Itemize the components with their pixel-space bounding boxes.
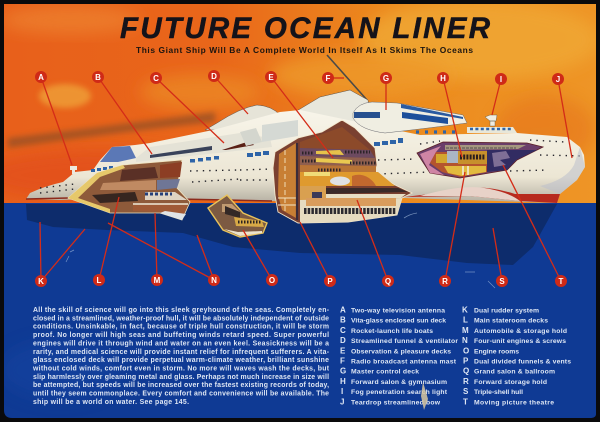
legend A to J: Radio broadcast antenna mast [351, 358, 457, 366]
callout markers: J [556, 75, 560, 84]
legend A to J: B [340, 316, 346, 325]
description text block: All the skill of science will go into this sleek greyhound of the seas. Completely en- [33, 307, 330, 314]
callout markers: E [268, 73, 274, 82]
callout markers: T [559, 277, 564, 286]
legend A to J: Observation & pleasure decks [351, 348, 451, 355]
legend K to T: L [463, 316, 468, 325]
legend A to J: Streamlined funnel & ventilator [351, 338, 458, 345]
hull waterline stripe [26, 198, 272, 201]
legend K to T: Moving picture theatre [474, 399, 554, 406]
description text block: engines will drive it through wind and water on an even keel. Seasickness will be a [33, 340, 329, 347]
callout markers: I [500, 75, 502, 84]
callout markers: F [326, 74, 331, 83]
stern deck funnel and sun deck detail [100, 120, 298, 162]
description text block: slip harmlessly over gleaming metal and glass. Perhaps not much increase in size will [33, 374, 329, 381]
underwater highlights [66, 213, 495, 288]
legend K to T: N [462, 336, 468, 345]
callout markers [35, 70, 567, 287]
legend A to J: I [341, 387, 343, 396]
legend A to J: G [340, 367, 346, 376]
description text block: without cold winds, comfort even in storm. No more will waves wash the decks, but [32, 366, 330, 372]
legend A to J: J [340, 397, 344, 406]
legend A to J: Vita-glass enclosed sun deck [351, 318, 446, 325]
callout markers: M [154, 276, 161, 285]
ocean liner illustration [26, 55, 585, 288]
description text block: ship will be a world on water. See page 145. [33, 399, 189, 406]
legend K to T: Dual divided funnels & vents [474, 358, 571, 366]
paper crease [421, 382, 428, 410]
legend A to J: Forward salon & gymnasium [351, 379, 447, 386]
callout markers: S [499, 277, 505, 286]
legend A to J: H [340, 377, 346, 386]
aft cutaway [68, 160, 190, 220]
legend K to T: S [463, 387, 469, 396]
callout markers: H [440, 74, 446, 83]
engine room cutaway [208, 195, 267, 237]
legend A to J: C [340, 326, 346, 335]
legend K to T [462, 306, 571, 406]
callout markers: P [327, 277, 333, 286]
bow shading [540, 147, 585, 194]
legend A to J [340, 306, 458, 406]
callout markers: D [211, 72, 217, 81]
description text block: rarity, and medical science will provide instant relief for infrequent sufferers. A vita- [33, 349, 330, 356]
description text block: proof. No longer will high seas and buffeting winds retard speed. Super powerful [33, 332, 329, 339]
legend K to T: Dual rudder system [474, 308, 539, 314]
legend K to T: Automobile & storage hold [474, 328, 567, 335]
legend A to J: E [340, 346, 346, 355]
legend K to T: Grand salon & ballroom [474, 369, 555, 376]
callout markers: B [95, 73, 101, 82]
legend K to T: Triple-shell hull [474, 389, 523, 396]
callout markers: G [383, 74, 389, 83]
title: FUTURE OCEAN LINER [120, 12, 491, 45]
legend A to J: D [340, 336, 346, 345]
description text block: conditions. Unsinkable, in fact, because of triple hull construction, it will be storm [33, 324, 329, 331]
main cutaway: funnels, salon and ballroom [273, 120, 412, 223]
subtitle: This Giant Ship Will Be A Complete World In Itself As It Skims The Oceans [136, 45, 473, 55]
callout leader lines [40, 76, 572, 281]
silhouettes in ballroom [304, 208, 396, 214]
funnel D [205, 105, 285, 130]
description text block: be attempted, but speeds will be increased over the fastest existing records of today, [33, 382, 329, 389]
legend A to J: A [340, 306, 346, 314]
callout markers: N [211, 276, 217, 285]
stern searchlight A [70, 166, 77, 174]
legend K to T: R [463, 377, 469, 386]
funnel F [295, 90, 372, 135]
legend K to T: K [462, 306, 468, 314]
submerged hull [26, 204, 557, 265]
legend A to J: F [340, 356, 345, 366]
callout markers: Q [385, 277, 391, 286]
legend A to J: Fog penetration search light [351, 389, 448, 396]
legend K to T: P [463, 356, 469, 366]
upper forward deck with portholes [416, 127, 517, 133]
sky background [0, 0, 600, 204]
radio antenna mast [327, 55, 367, 100]
callout markers: L [97, 276, 102, 285]
callout markers: O [269, 276, 275, 285]
hull porthole rows [40, 140, 584, 193]
description text block: until they seem commonplace. Every comfort and convenience will be available. The [33, 391, 329, 398]
description text block: closed in a streamlined, weather-proof hull, it will be absolutely independent of outside [33, 315, 329, 322]
legend K to T: Forward storage hold [474, 379, 547, 386]
legend K to T: T [463, 397, 468, 406]
hull windows [91, 138, 403, 172]
forward cutaway: salon and theatre [417, 142, 543, 178]
sea [0, 203, 596, 419]
legend A to J: Master control deck [351, 369, 419, 376]
legend K to T: Four-unit engines & screws [474, 338, 566, 345]
stern hull and superstructure [26, 110, 585, 203]
legend K to T: Engine rooms [474, 348, 519, 355]
legend K to T: Q [463, 367, 469, 376]
callout markers: R [442, 277, 448, 286]
callout markers: K [38, 277, 44, 286]
legend A to J: Two-way television antenna [351, 308, 445, 314]
description text block: glass enclosed deck will provide perpetual warm-climate weather, brilliant sunshine [33, 357, 329, 364]
silhouettes on upper decks [302, 152, 376, 170]
searchlight I [485, 115, 497, 126]
legend K to T: M [462, 326, 469, 335]
legend A to J: Rocket-launch life boats [351, 328, 433, 335]
bow wave and red waterline [404, 187, 560, 203]
callout markers: A [38, 73, 44, 82]
control deck G [353, 102, 467, 133]
legend K to T: O [463, 346, 469, 355]
callout markers: C [153, 74, 159, 83]
description text block [32, 307, 330, 406]
legend K to T: Main stateroom decks [474, 318, 548, 325]
legend A to J: Teardrop streamlined bow [351, 399, 441, 406]
